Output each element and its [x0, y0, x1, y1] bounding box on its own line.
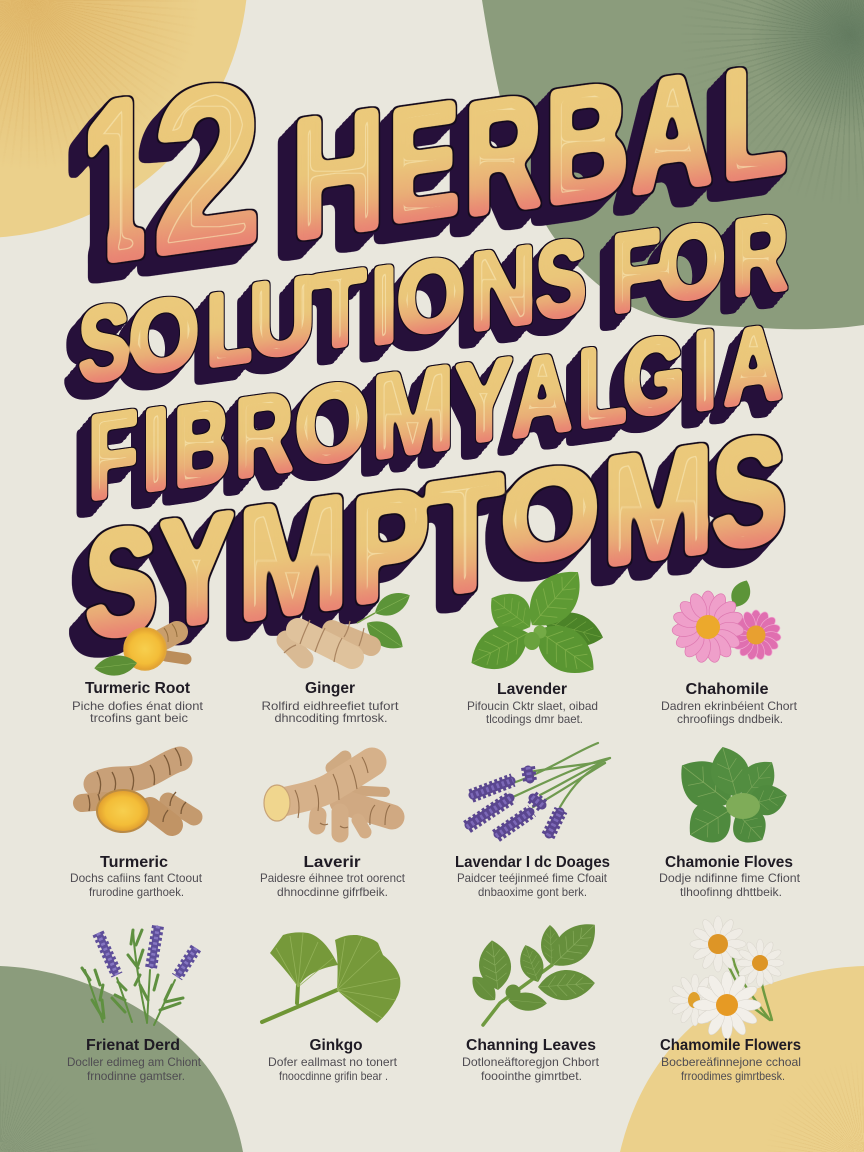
- title line: FIBROMYALGIA: F: [88, 385, 138, 525]
- title line: 12 HERBAL: A: [631, 39, 713, 228]
- heading: Turmeric Root: [85, 680, 191, 697]
- title line: SOLUTIONS FOR: O: [658, 200, 726, 325]
- title line: SOLUTIONS FOR: I: [370, 242, 398, 369]
- description: [462, 1055, 600, 1083]
- description: Paidesre éihnee trot oorenct: [260, 871, 406, 885]
- title line: FIBROMYALGIA: B: [174, 376, 230, 512]
- description: frnodinne gamtser.: [87, 1069, 185, 1083]
- heading: Lavender: [497, 681, 567, 698]
- description: tlhoofinng dhttbeik.: [680, 885, 782, 899]
- panel: Chamomile: [661, 577, 798, 726]
- title line: FIBROMYALGIA: A: [723, 301, 783, 429]
- heading: Channing Leaves: [466, 1037, 596, 1054]
- icon: lavender sprigs: [467, 743, 610, 836]
- title line: FIBROMYALGIA: R: [235, 368, 293, 502]
- description: frurodine garthoek.: [89, 885, 184, 899]
- title line: FIBROMYALGIA: I: [692, 305, 718, 435]
- description: Dodje ndifinne fime Cfiont: [659, 871, 801, 885]
- description: [457, 871, 608, 899]
- description: dhncoditing fmrtosk.: [274, 711, 388, 725]
- description: Pifoucin Cktr slaet, oibad: [467, 699, 598, 713]
- panel: Turmeric Root: [72, 624, 204, 725]
- heading: Laverir: [304, 854, 360, 871]
- title line: FIBROMYALGIA: Y: [455, 334, 513, 469]
- icon: compound leaf branch: [466, 913, 606, 1025]
- title line: 12 HERBAL: 1: [82, 49, 154, 312]
- title line: SOLUTIONS FOR: S: [78, 280, 130, 406]
- heading: Turmeric: [100, 854, 168, 871]
- description: [260, 871, 406, 899]
- title line: 12 HERBAL: R: [464, 59, 542, 249]
- description: [262, 699, 399, 725]
- title line: 12 HERBAL: E: [388, 68, 460, 258]
- title line: FIBROMYALGIA: M: [372, 341, 454, 485]
- description: dhnocdinne gifrfbeik.: [277, 885, 388, 899]
- title line: SOLUTIONS FOR: N: [470, 221, 536, 355]
- description: [467, 699, 598, 726]
- title line: SYMPTOMS: Y: [159, 479, 235, 661]
- title line: SYMPTOMS: S: [712, 404, 786, 582]
- description: frroodimes gimrtbesk.: [681, 1069, 785, 1083]
- heading: Chahomile: [686, 681, 769, 698]
- icon: ginger root with leaves: [284, 586, 414, 662]
- description: Paidcer teéjinmeé fime Cfoait: [457, 871, 608, 885]
- description: Dochs cafiins fant Ctoout: [70, 871, 203, 885]
- background blob: top-left yellow: [0, 0, 246, 238]
- description: fooointhe gimrtbet.: [481, 1069, 582, 1083]
- icon: ginger root with cut end: [264, 757, 392, 834]
- description: Rolfird eidhreefiet tufort: [262, 699, 399, 713]
- panel: Turmeric: [70, 748, 203, 899]
- title line: SOLUTIONS FOR: O: [129, 273, 199, 397]
- icon: green leaf cluster: [668, 742, 790, 853]
- description: Dotloneäftoregjon Chbort: [462, 1055, 600, 1069]
- panel: Ginkgo: [262, 932, 400, 1083]
- description: Dadren ekrinbéient Chort: [661, 699, 798, 713]
- background blob: bottom-left green: [0, 966, 243, 1152]
- description: dnbaoxime gont berk.: [478, 885, 587, 899]
- title line: FIBROMYALGIA: [88, 301, 783, 525]
- description: [268, 1055, 398, 1083]
- title line: SOLUTIONS FOR: O: [397, 235, 465, 358]
- panel: Lavender: [462, 558, 607, 726]
- title line: SOLUTIONS FOR: L: [206, 268, 252, 390]
- icon: lavender and rosemary: [82, 926, 196, 1025]
- title line: SYMPTOMS: M: [602, 411, 714, 599]
- panel: Channing Leaves: [462, 913, 606, 1083]
- title line: SYMPTOMS: S: [85, 492, 157, 671]
- heading: Frienat Derd: [86, 1037, 180, 1054]
- description: [661, 699, 798, 726]
- icon: turmeric root with cut face: [82, 748, 194, 833]
- title line: FIBROMYALGIA: G: [623, 312, 685, 441]
- description: trcofins gant beic: [90, 711, 188, 725]
- heading: Chamomile Flowers: [660, 1037, 801, 1054]
- description: chroofiings dndbeik.: [677, 712, 783, 726]
- icon: daisies: [669, 916, 784, 1039]
- description: tlcodings dmr baet.: [486, 712, 583, 726]
- title line: FIBROMYALGIA: I: [141, 381, 171, 516]
- background blob: top-right green: [482, 0, 864, 330]
- title line: FIBROMYALGIA: L: [578, 320, 626, 452]
- title line: SOLUTIONS FOR: S: [536, 216, 586, 342]
- title line: 12 HERBAL: 2: [154, 34, 260, 302]
- description: [661, 1055, 801, 1083]
- panel: Chamonie Floves: [659, 742, 801, 899]
- title line: SYMPTOMS: P: [351, 455, 429, 636]
- description: Dofer eallmast no tonert: [268, 1055, 398, 1069]
- background blob: bottom-right yellow: [620, 966, 864, 1152]
- panel: Chamomile Flowers: [660, 916, 801, 1083]
- title line: FIBROMYALGIA: O: [295, 357, 369, 489]
- title line: 12 HERBAL: L: [721, 32, 787, 214]
- title line: FIBROMYALGIA: A: [512, 329, 572, 461]
- icon: turmeric root with slice: [93, 624, 186, 678]
- heading: Ginkgo: [310, 1037, 363, 1054]
- panel: Lavendar I dc Doages: [455, 743, 610, 899]
- description: [659, 871, 801, 899]
- description: [70, 871, 203, 899]
- panel: Frienat Derd: [67, 926, 202, 1083]
- title line: 12 HERBAL: B: [545, 47, 629, 239]
- title line: SYMPTOMS: O: [500, 437, 600, 593]
- heading: Chamonie Floves: [665, 854, 793, 871]
- description: Bocbereäfinnejone cchoal: [661, 1055, 801, 1069]
- heading: Ginger: [305, 680, 355, 697]
- title line: SOLUTIONS FOR: T: [314, 245, 366, 373]
- title line: SYMPTOMS: T: [427, 439, 503, 630]
- title line: SOLUTIONS FOR: F: [611, 204, 661, 337]
- description: [72, 699, 204, 725]
- title: [78, 32, 788, 671]
- title line: 12 HERBAL: [68, 66, 788, 284]
- panel: Ginger: [262, 586, 414, 725]
- title line: SOLUTIONS FOR: [78, 191, 788, 406]
- icon: pink flowers: [671, 577, 781, 664]
- title line: SYMPTOMS: M: [238, 461, 348, 655]
- title line: SYMPTOMS: [85, 404, 786, 671]
- heading: Lavendar I dc Doages: [455, 854, 610, 871]
- title line: SOLUTIONS FOR: U: [249, 253, 315, 382]
- description: Docller edimeg am Chiont: [67, 1055, 202, 1069]
- description: [67, 1055, 202, 1083]
- title line: SOLUTIONS FOR: R: [732, 191, 788, 321]
- panel: Laverir: [260, 757, 406, 899]
- description: fnoocdinne grifin bear .: [279, 1069, 388, 1083]
- description: Piche dofies énat diont: [72, 699, 204, 713]
- icon: ginkgo leaves: [262, 932, 400, 1023]
- icon: mint leaves: [462, 558, 607, 687]
- title line: 12 HERBAL: H: [291, 73, 385, 276]
